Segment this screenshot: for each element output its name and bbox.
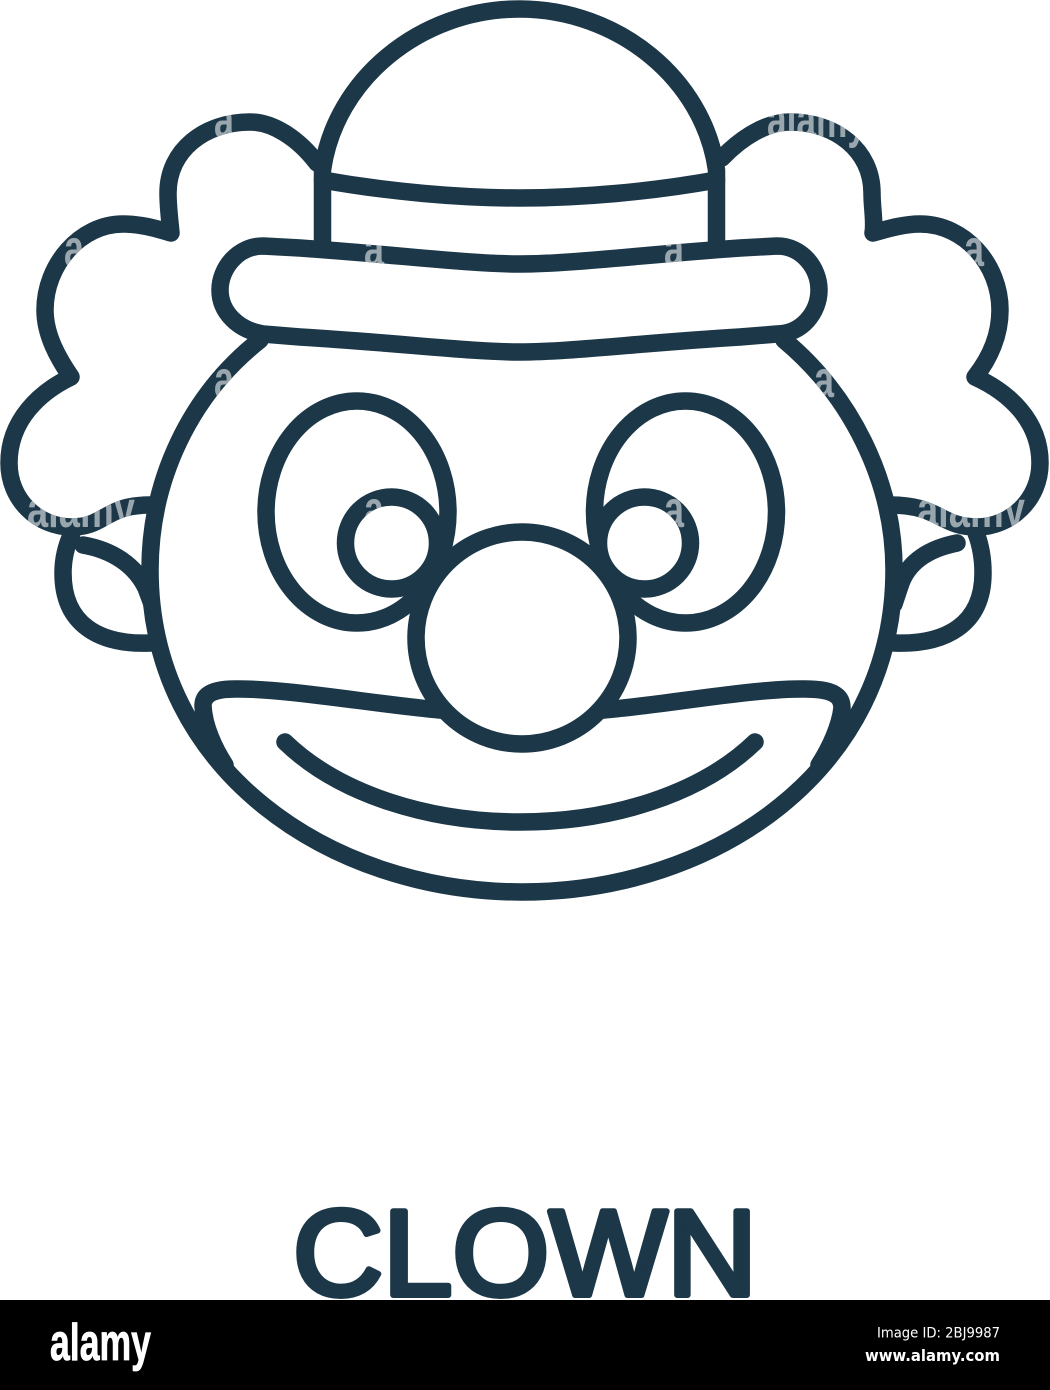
nose [416,532,628,744]
smile [285,742,755,822]
website: www.alamy.com [865,1346,1000,1365]
icon: clown face [9,9,1040,892]
watermark fragments on strokes: a [664,481,685,539]
hair: left [9,122,317,527]
watermark fragments on strokes: a [964,220,985,278]
eye: left [266,401,448,623]
footer bar [0,1300,1050,1390]
eye: right [594,401,776,623]
hair: right [722,122,1040,527]
hat band [322,180,716,198]
ear: right [894,533,983,643]
mouth upper line [203,689,842,765]
watermark fragments on strokes: a [364,220,385,278]
pupil: right [598,497,690,589]
title: CLOWN: CLOWN [293,1185,757,1321]
logo: alamy: alamy [50,1314,151,1372]
watermark fragments on strokes: a [664,220,685,278]
pupil: left [346,497,438,589]
watermark fragments on strokes: a [364,481,385,539]
watermark fragments on strokes [27,91,1025,539]
image id: Image ID: 2BJ9987 [877,1326,1000,1342]
watermark fragments on strokes: a [64,220,85,278]
watermark fragments on strokes: a [814,351,835,409]
hat dome [322,9,716,245]
head [150,340,894,892]
watermark fragments on strokes: a [214,351,235,409]
watermark fragments on strokes: a [214,91,235,149]
watermark fragments on strokes: alamy [27,481,135,539]
watermark fragments on strokes: alamy [767,91,867,149]
ear: left [63,533,152,643]
hat brim [220,246,819,352]
